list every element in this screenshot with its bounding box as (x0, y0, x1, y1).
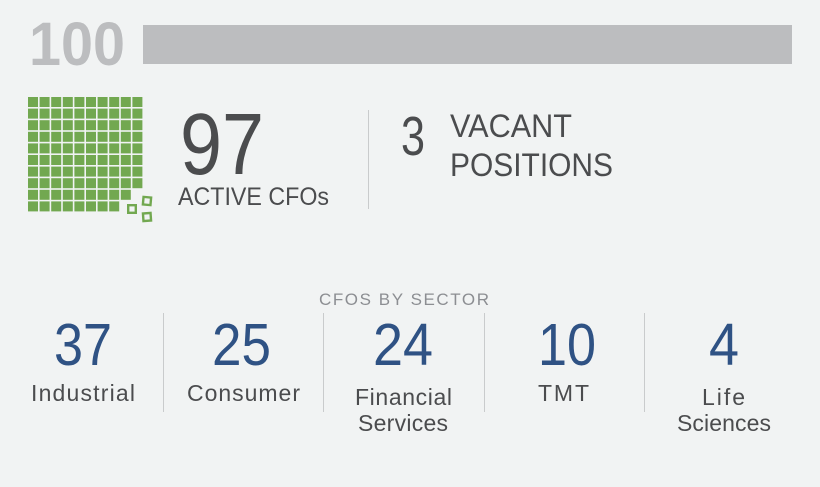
sector: Life Sciences: 4 (709, 312, 739, 378)
sector: Industrial (31, 312, 135, 406)
vacant count: 3 (401, 105, 425, 167)
sector: Financial Services: 24 (373, 312, 433, 378)
sector: Consumer (187, 312, 300, 406)
sector: Industrial: 37 (54, 312, 112, 378)
total bar (143, 25, 792, 64)
sector: Financial Services (355, 312, 452, 436)
sector: Life Sciences: Sciences (677, 410, 771, 436)
sector: Consumer: Consumer (187, 380, 300, 406)
sector: TMT (538, 312, 596, 406)
sector heading: CFOS BY SECTOR (319, 290, 489, 309)
sector: TMT: 10 (538, 312, 596, 378)
sector: Life Sciences (677, 312, 771, 436)
total count: 100: 100 (29, 10, 125, 78)
active CFO label: ACTIVE CFOs (178, 183, 329, 211)
sector: Financial Services: Services (358, 410, 448, 436)
icon: 97 filled squares and 3 vacant squares (28, 97, 151, 221)
vacant positions label: POSITIONS (450, 147, 613, 183)
vacant positions label: VACANT (450, 108, 572, 144)
sector: Consumer: 25 (212, 312, 271, 378)
sector: Life Sciences: Life (702, 384, 745, 410)
active CFO count: 97 (180, 96, 264, 193)
sector: TMT: TMT (538, 380, 589, 406)
sector: Industrial: Industrial (31, 380, 135, 406)
sector: Financial Services: Financial (355, 384, 452, 410)
